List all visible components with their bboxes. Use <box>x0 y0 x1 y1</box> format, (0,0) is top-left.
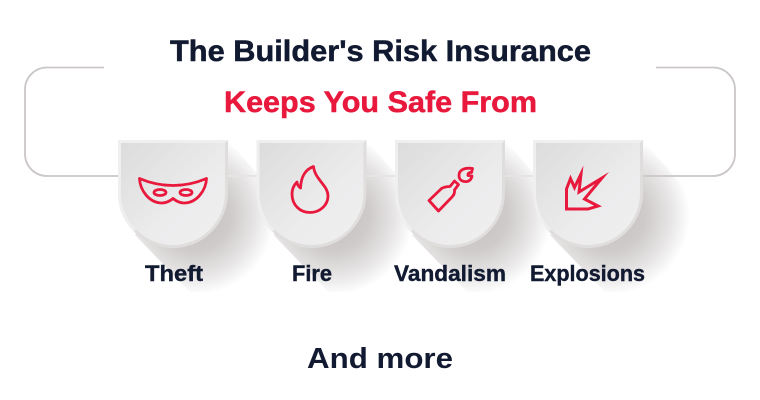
icon: mask <box>140 178 206 203</box>
closing text: And more <box>307 343 453 375</box>
label: vandalism: Vandalism <box>394 261 506 286</box>
icon: explosion <box>566 174 602 209</box>
icon: molotov bottle <box>429 168 472 211</box>
shield: fire <box>256 140 366 248</box>
title <box>170 35 591 119</box>
card: explosions <box>530 140 645 286</box>
shield: explosions <box>533 140 643 248</box>
title: Keeps You Safe From <box>224 86 537 119</box>
label: theft: Theft <box>145 261 204 286</box>
title: The Builder's Risk Insurance <box>170 35 591 68</box>
shield: theft <box>118 140 228 248</box>
rounded frame <box>25 68 735 176</box>
card: vandalism <box>394 140 506 286</box>
label: explosions: Explosions <box>530 261 645 286</box>
icon: flame <box>292 166 328 212</box>
shield: vandalism <box>395 140 505 248</box>
label: fire: Fire <box>292 261 332 286</box>
card shadows <box>135 140 705 292</box>
card: theft <box>118 140 228 286</box>
card: fire <box>256 140 366 286</box>
